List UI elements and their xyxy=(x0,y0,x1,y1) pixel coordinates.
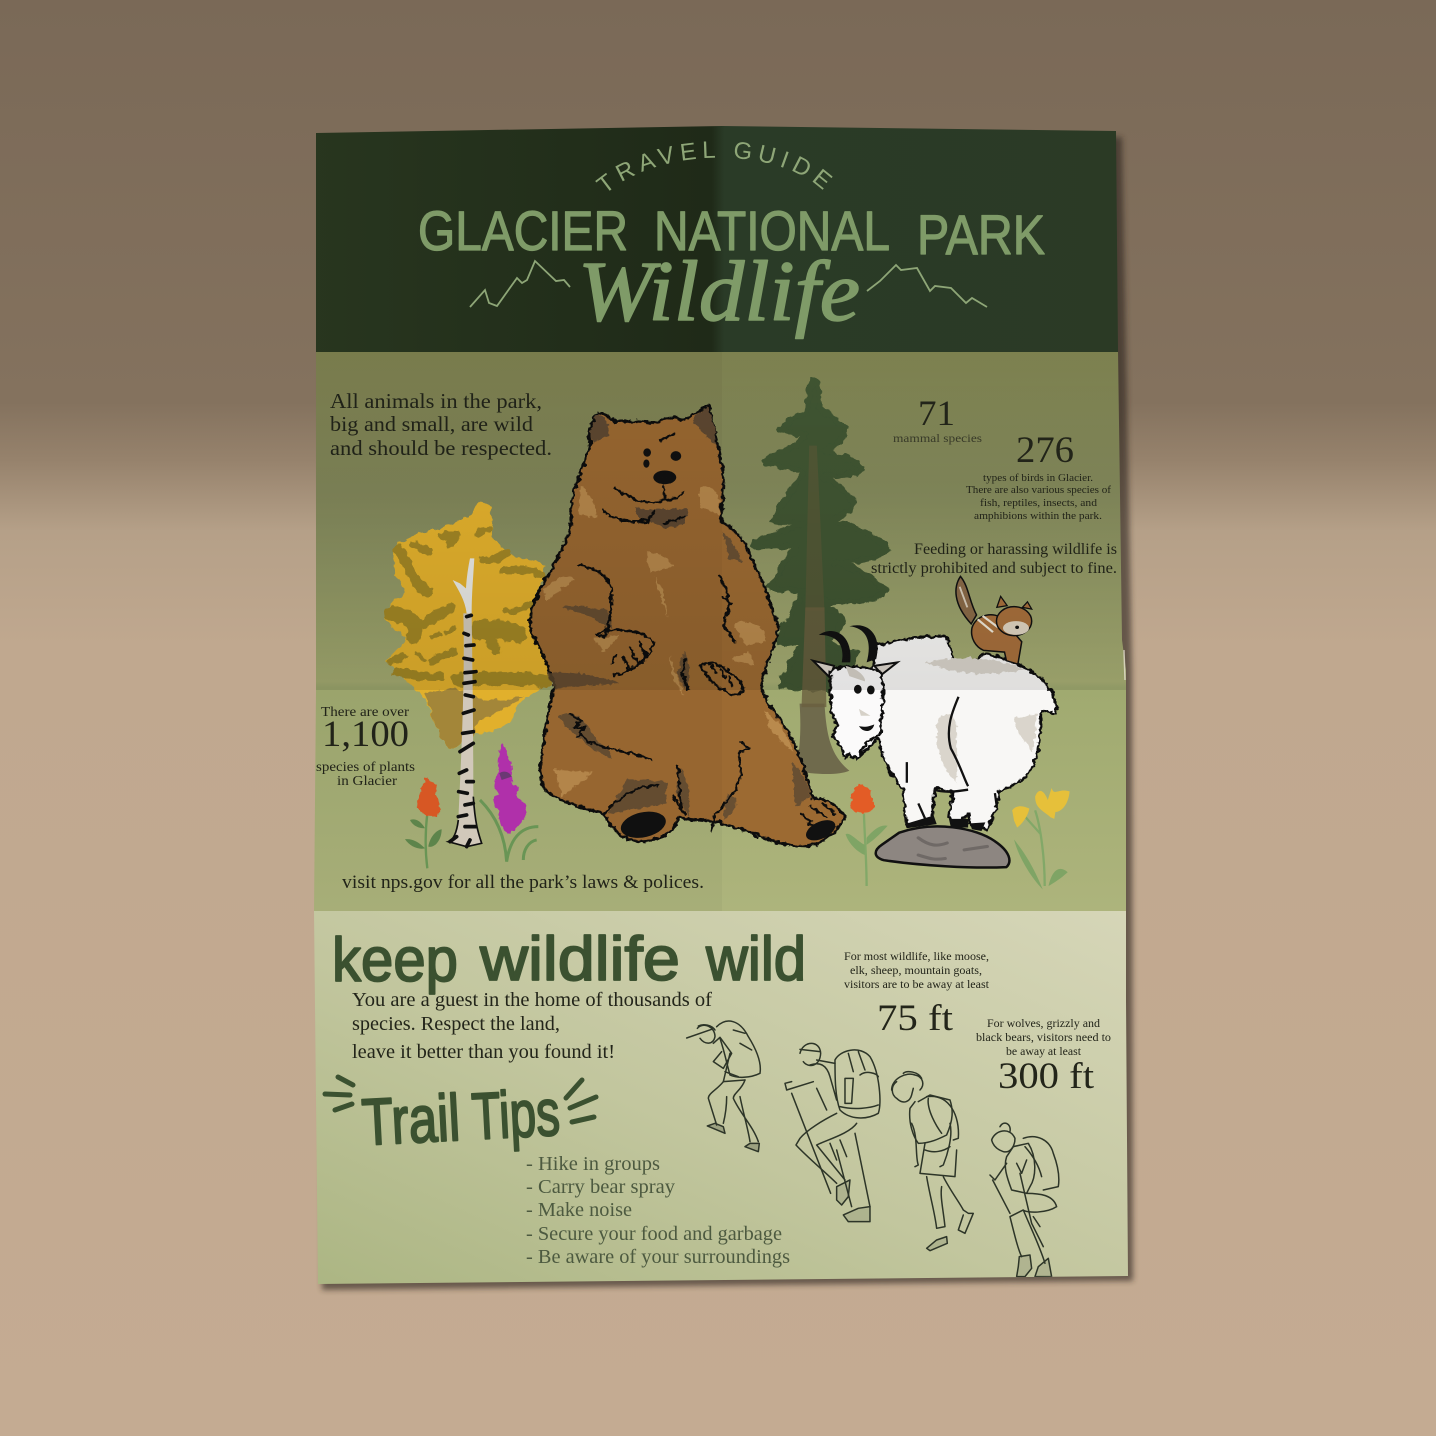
goat leg markings xyxy=(907,697,997,821)
heading: keep wildlife wild: wildlife xyxy=(479,925,680,994)
illustration: aspen tree xyxy=(385,502,552,847)
rock xyxy=(876,826,1009,868)
title: glacier national park: GLACIER xyxy=(418,199,628,262)
bear ears xyxy=(591,408,716,446)
guest text xyxy=(352,990,713,1063)
heading: trail tips: Trail xyxy=(360,1080,462,1159)
distance: 75 ft: visitors are to be away at least xyxy=(844,979,990,991)
guest text: species. Respect the land, xyxy=(352,1014,560,1035)
stat: 1,100 species of plants: in Glacier xyxy=(337,774,397,789)
distance: 300 ft: black bears, visitors need to xyxy=(976,1032,1111,1044)
stat: 1,100 species of plants: There are over xyxy=(321,705,409,720)
title: glacier national park: NATIONAL xyxy=(654,199,890,262)
guest text: leave it better than you found it! xyxy=(352,1042,615,1063)
stat: 1,100 species of plants: species of plants xyxy=(316,760,415,775)
stat: 276 types of birds: types of birds in Glacier. xyxy=(983,472,1093,484)
illustration: four hikers xyxy=(687,1021,1059,1277)
distance: 75 ft: For most wildlife, like moose, xyxy=(844,951,989,963)
distance: 75 ft: elk, sheep, mountain goats, xyxy=(850,965,982,977)
heading: keep wildlife wild: wild xyxy=(705,925,806,994)
goat body xyxy=(857,636,1056,829)
trail tips list: - Be aware of your surroundings xyxy=(526,1247,790,1268)
intro text xyxy=(330,389,552,460)
illustration: grizzly bear xyxy=(530,406,846,846)
distance: 300 ft xyxy=(976,1018,1111,1097)
hiker 2 xyxy=(785,1043,880,1222)
bear face xyxy=(602,434,685,523)
stat: 71 mammal species xyxy=(893,402,982,444)
paper curl highlight xyxy=(1124,650,1125,680)
poster shadow xyxy=(322,137,1133,1290)
goat face xyxy=(854,685,875,731)
guest text: You are a guest in the home of thousands of xyxy=(352,990,713,1011)
horizontal fold shading xyxy=(300,352,1140,690)
distance: 300 ft: For wolves, grizzly and xyxy=(987,1018,1100,1030)
distance: 300 ft: be away at least xyxy=(1006,1046,1082,1058)
stat: 276 types of birds: There are also various species of xyxy=(966,484,1111,496)
panel: keep wildlife wild xyxy=(300,911,1140,1291)
aspen foliage xyxy=(385,502,552,748)
trail tips list: - Hike in groups xyxy=(526,1154,660,1175)
stat: 71 mammal species: mammal species xyxy=(893,431,982,445)
illustration: left flowers xyxy=(405,743,538,868)
orange paintbrush flower xyxy=(846,784,888,886)
bear legs xyxy=(570,714,834,838)
magenta fireweed flower xyxy=(480,743,538,862)
title: wildlife script: Wildlife xyxy=(578,243,860,339)
icon: left mountains xyxy=(470,261,570,307)
hiker 4 xyxy=(990,1123,1059,1277)
stat: 276 types of birds xyxy=(966,430,1111,522)
intro text: big and small, are wild xyxy=(330,412,534,436)
hiker 1 xyxy=(687,1021,760,1152)
intro text: and should be respected. xyxy=(330,436,552,460)
illustration: chipmunk xyxy=(956,576,1032,664)
goat horns xyxy=(819,625,878,662)
stat: 276 types of birds: fish, reptiles, insects, and xyxy=(980,497,1098,509)
title: travel guide: TRAVEL GUIDE xyxy=(595,142,833,191)
heading: keep wildlife wild: keep xyxy=(332,926,458,995)
stat: 71 mammal species: 71 xyxy=(918,393,955,433)
trail tips list: - Carry bear spray xyxy=(526,1177,675,1198)
hiker 3 xyxy=(892,1072,973,1251)
trail tips list: - Make noise xyxy=(526,1200,632,1221)
birch trunk xyxy=(448,558,482,847)
stat: 1,100 species of plants: 1,100 xyxy=(322,714,409,755)
icon: trail tips rays xyxy=(325,1077,596,1122)
distance: 75 ft: 75 ft xyxy=(877,998,954,1039)
stat: 276 types of birds: 276 xyxy=(1016,430,1074,471)
icon: right mountains xyxy=(867,265,987,307)
yellow glacier lilies xyxy=(1012,788,1070,889)
distance: 300 ft: 300 ft xyxy=(998,1056,1095,1097)
nps.gov note: visit nps.gov for all the park’s laws & polices. xyxy=(342,872,704,893)
panel: header xyxy=(300,120,1140,352)
illustration: spruce tree xyxy=(754,380,888,774)
feeding warning text xyxy=(871,541,1117,577)
intro text: All animals in the park, xyxy=(330,389,542,413)
trail tips list xyxy=(526,1154,790,1268)
feeding warning text: strictly prohibited and subject to fine. xyxy=(871,560,1117,577)
stat: 1,100 species of plants xyxy=(316,705,415,789)
trail tips list: - Secure your food and garbage xyxy=(526,1224,782,1245)
heading: trail tips: Tips xyxy=(470,1075,562,1153)
bear arms and paws xyxy=(579,564,743,695)
vertical fold shading xyxy=(300,352,722,911)
illustration: right flowers xyxy=(846,784,1070,889)
bear foot pads xyxy=(618,807,839,845)
title: glacier national park: PARK xyxy=(917,203,1045,266)
illustration: mountain goat on rock xyxy=(813,625,1056,868)
stat: 276 types of birds: amphibions within the park. xyxy=(974,510,1102,522)
poster xyxy=(300,120,1140,1291)
panel: wildlife scene xyxy=(300,352,1140,911)
feeding warning text: Feeding or harassing wildlife is xyxy=(914,541,1117,558)
distance: 75 ft xyxy=(844,951,990,1039)
goat head xyxy=(830,666,883,760)
bear eyes and nose xyxy=(643,448,681,484)
orange paintbrush flower xyxy=(405,778,442,868)
